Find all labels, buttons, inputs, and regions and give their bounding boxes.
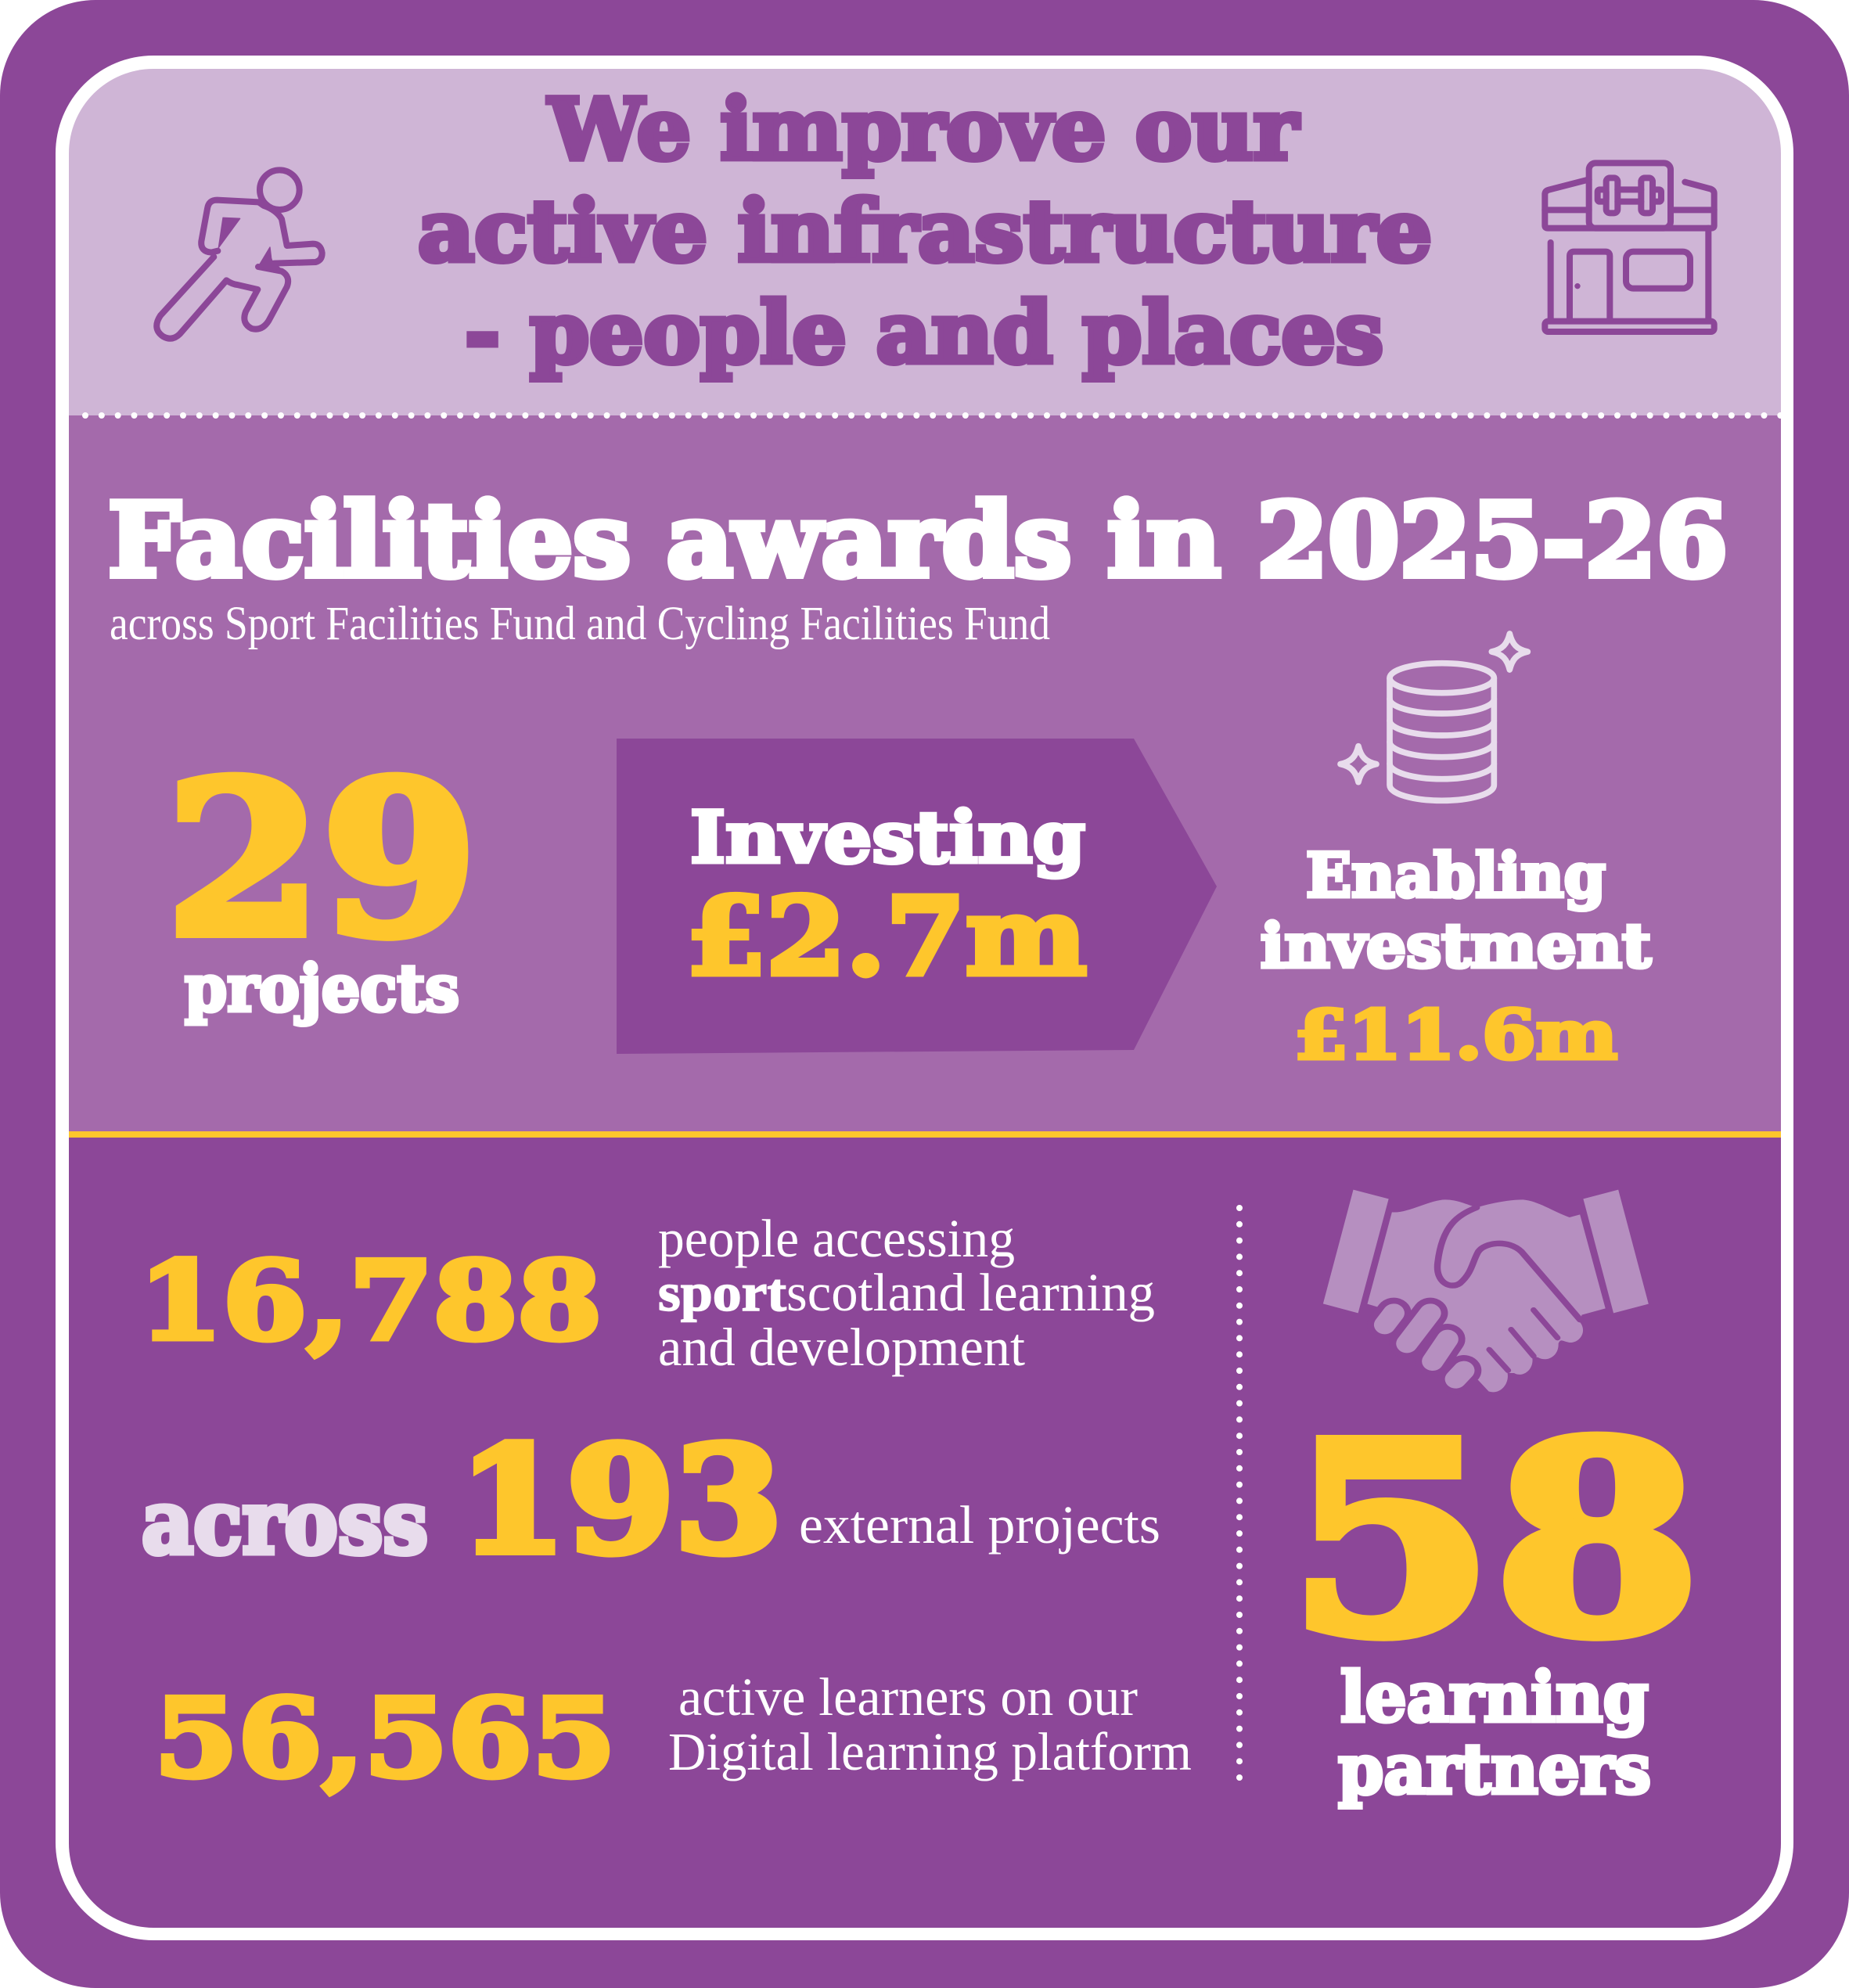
stat: across 193 external projects: external projects xyxy=(799,1495,1160,1555)
title xyxy=(418,81,1432,383)
arrow: investing: £2.7m xyxy=(686,874,1087,1000)
stat: 16,788 people: and development xyxy=(658,1318,1025,1377)
panel: header xyxy=(69,69,1781,415)
heading: facilities awards: Facilities awards in 2025-26 xyxy=(108,480,1728,600)
title: We improve our xyxy=(548,81,1300,179)
stat: 16,788 people xyxy=(138,1209,1155,1377)
stat: enabling investment: Enabling xyxy=(1306,840,1606,911)
stat: 56,565 active learners: 56,565 xyxy=(154,1674,616,1802)
icon: coin stack with sparkles xyxy=(1340,634,1527,800)
stat: across 193 external projects: across xyxy=(142,1472,428,1574)
stat: 16,788 people: 16,788 xyxy=(138,1237,602,1364)
stat: across 193 external projects xyxy=(142,1415,1160,1587)
stat: 56,565 active learners: Digital learning platform xyxy=(668,1722,1192,1781)
icon: runner xyxy=(156,170,322,339)
title: active infrastructure xyxy=(418,182,1432,281)
stat: enabling investment: £11.6m xyxy=(1294,996,1617,1075)
stat: 58 learning partners: learning xyxy=(1340,1656,1649,1738)
stat: across 193 external projects: 193 xyxy=(459,1415,782,1587)
stat: 58 learning partners xyxy=(1288,1386,1700,1810)
header block xyxy=(156,81,1714,383)
panel: learning stats xyxy=(69,1132,1781,1930)
panel: facilities awards xyxy=(69,415,1781,1132)
stat: 16,788 people: scotland learning xyxy=(786,1263,1155,1322)
stat: 58 learning partners: 58 xyxy=(1288,1386,1700,1695)
icon: handshake xyxy=(1323,1190,1649,1392)
stat: enabling investment xyxy=(1261,840,1651,1075)
arrow: investing xyxy=(617,739,1217,1054)
stat: enabling investment: investment xyxy=(1261,911,1651,982)
stat: 58 learning partners: partners xyxy=(1338,1728,1651,1810)
stat: 29 projects: projects xyxy=(185,951,459,1026)
stat: 56,565 active learners xyxy=(154,1667,1192,1802)
icon: gym building xyxy=(1545,163,1714,332)
title: - people and places xyxy=(465,284,1383,383)
stat: 29 projects: 29 xyxy=(166,735,477,983)
stat: 16,788 people: people accessing xyxy=(658,1209,1015,1268)
subheading: across Sport Facilities Fund and Cycling Facilities Fund xyxy=(110,598,1050,650)
stat: 56,565 active learners: active learners on our xyxy=(678,1667,1138,1727)
arrow: investing: Investing xyxy=(690,796,1085,879)
stat: 16,788 people: sport xyxy=(658,1263,786,1322)
